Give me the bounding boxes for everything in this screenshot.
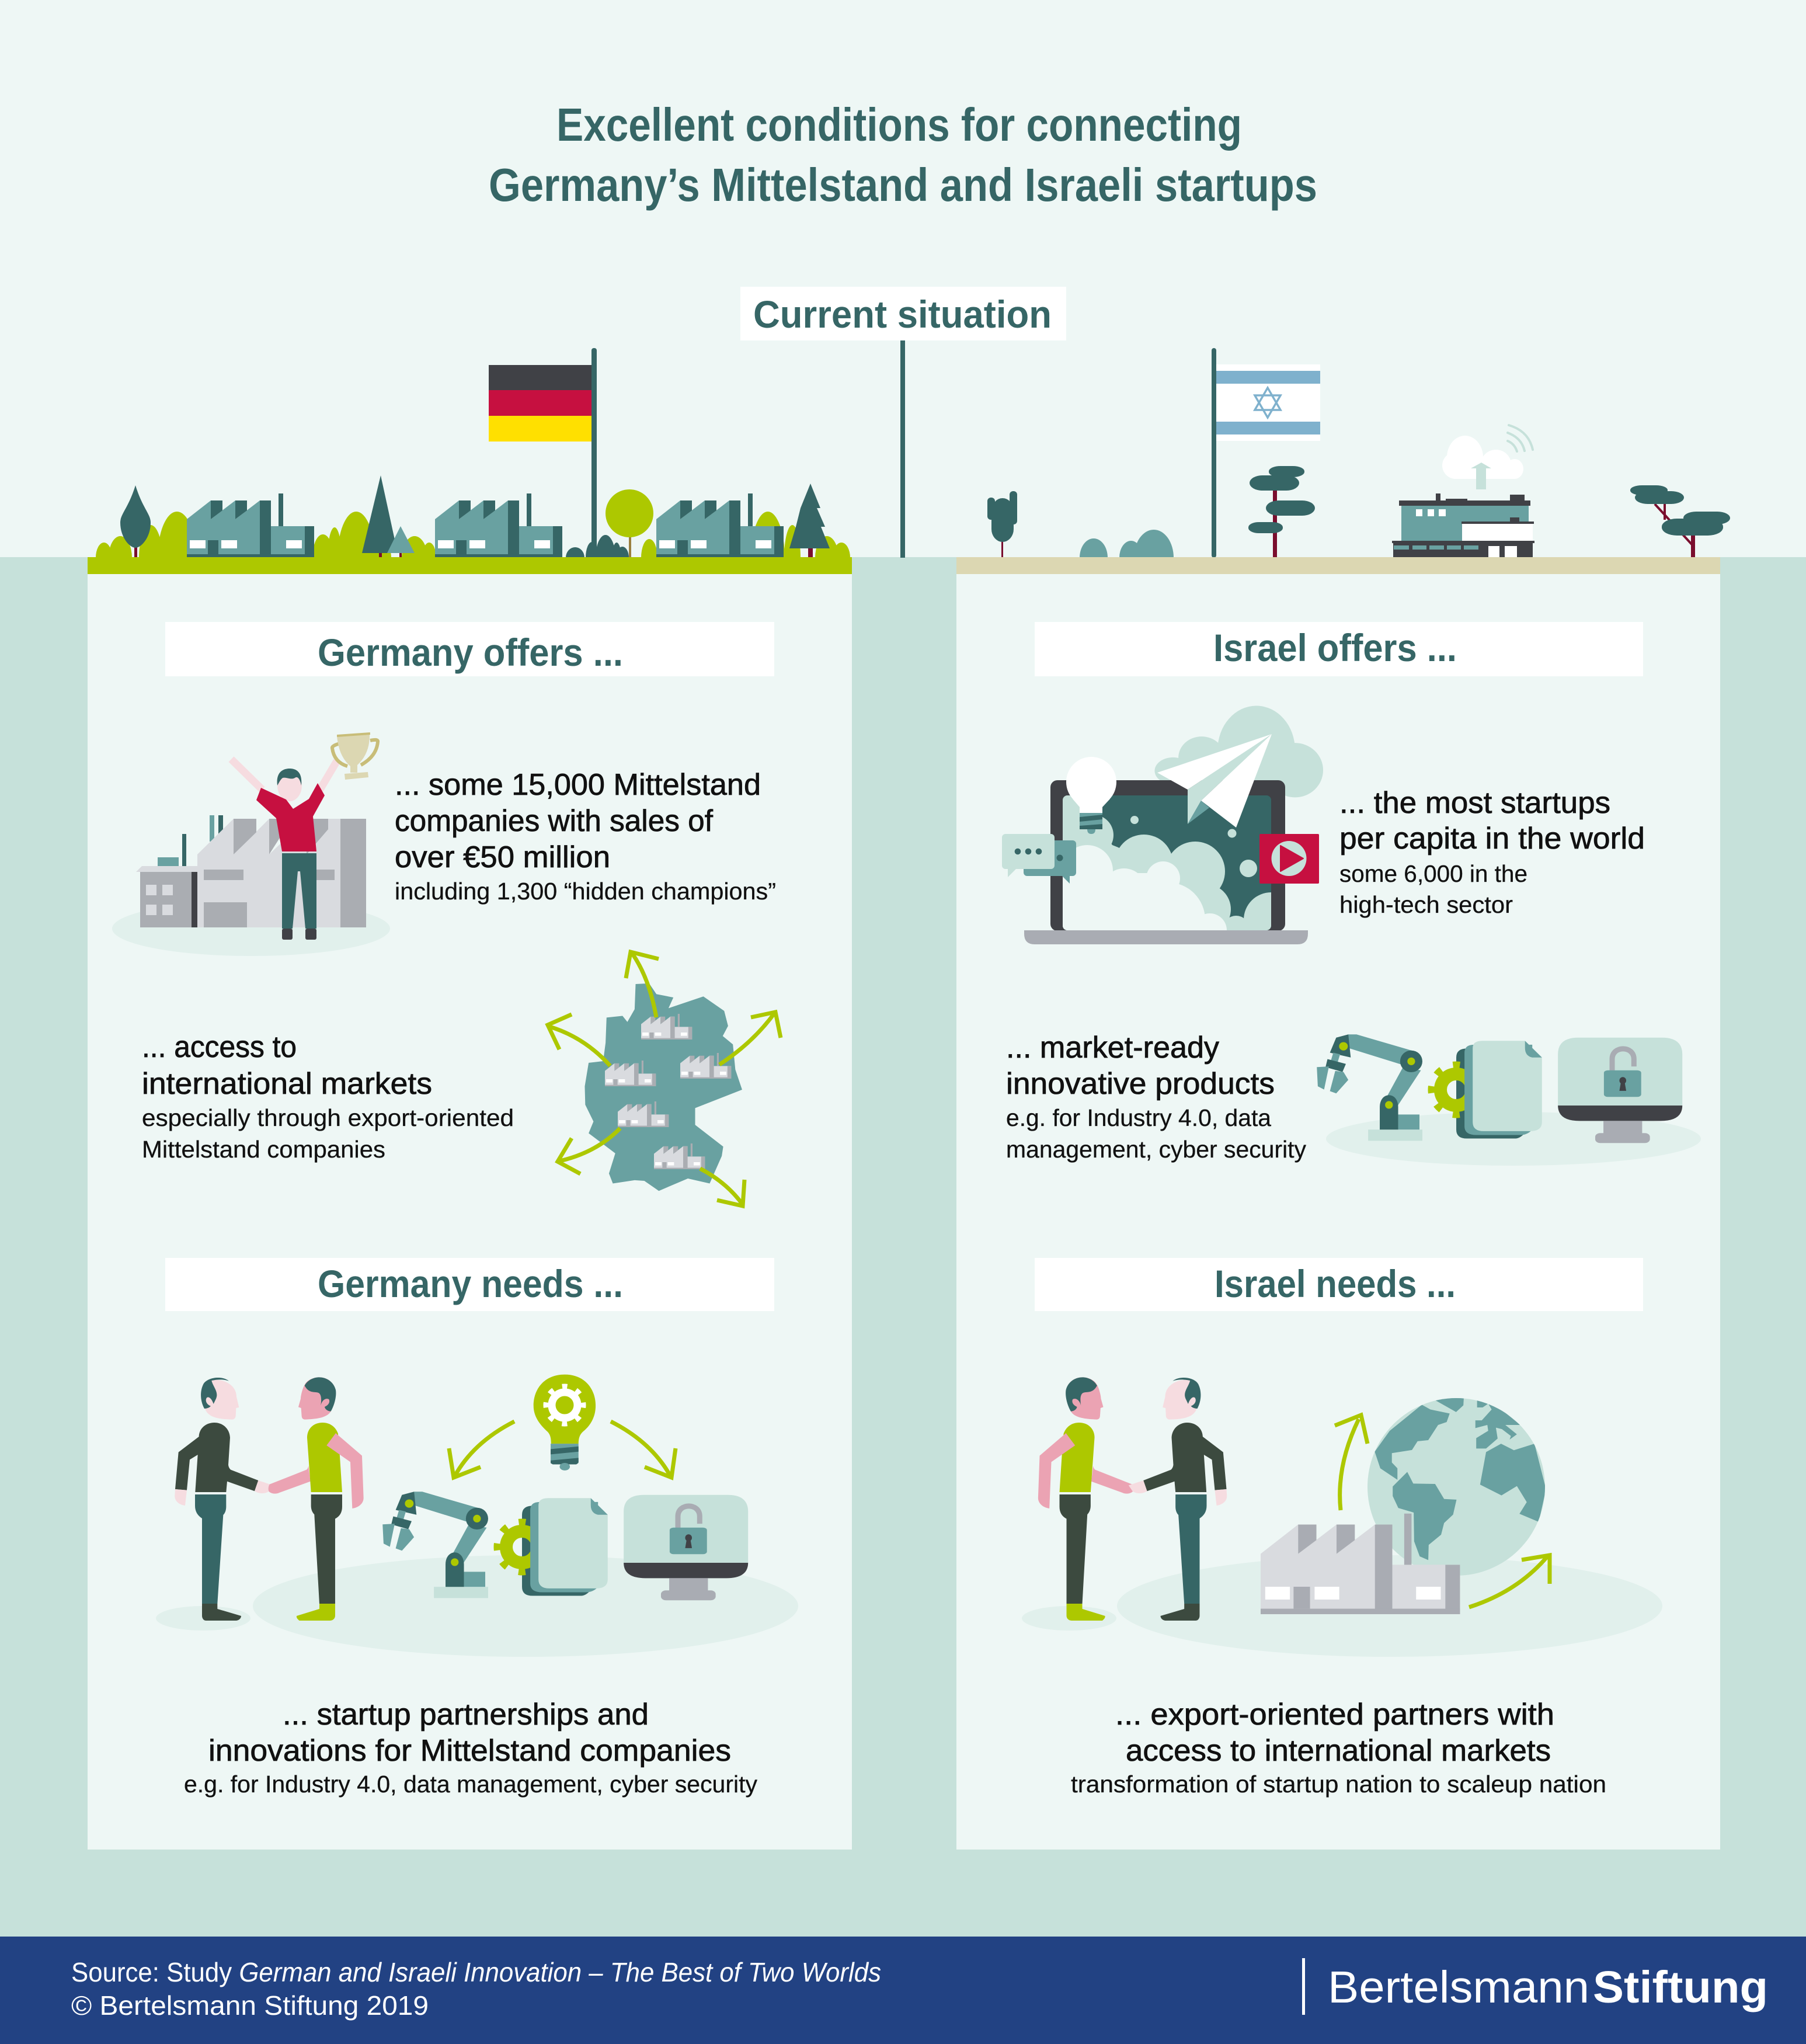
text: market-ready innovative products: ... market-ready xyxy=(1006,1031,1219,1065)
text: export-oriented partners xyxy=(1071,1698,1606,1798)
source text: Source: Study German and Israeli Innovation – The Best of Two Worlds xyxy=(71,1957,881,1987)
text: market-ready innovative products xyxy=(1006,1031,1306,1163)
heading: Israel offers: Israel offers ... xyxy=(1213,626,1457,669)
bushes xyxy=(96,512,850,557)
illustration: robot arm, documents and locked monitor xyxy=(382,1492,748,1600)
man xyxy=(231,759,337,940)
cloud with upload arrow and wifi xyxy=(1442,425,1533,489)
icon: speech bubbles xyxy=(1002,834,1076,884)
text: 15,000 Mittelstand companies: ... some 15,000 Mittelstand xyxy=(395,768,761,802)
text: export-oriented partners: transformation of startup nation to scaleup nation xyxy=(1071,1771,1606,1798)
landscape: Israel xyxy=(956,348,1730,586)
text: startup partnerships xyxy=(184,1698,757,1798)
arrow to robot xyxy=(449,1421,514,1478)
title: Excellent conditions for connecting xyxy=(556,99,1242,151)
landscape: Germany xyxy=(88,348,852,574)
person: pink man xyxy=(1038,1377,1133,1621)
panel: Israel xyxy=(956,557,1720,1850)
text: 15,000 Mittelstand companies: companies with sales of xyxy=(395,804,714,838)
text: export-oriented partners: ... export-oriented partners with xyxy=(1115,1698,1554,1732)
shadow under people left xyxy=(156,1606,250,1631)
tree xyxy=(987,491,1017,558)
text: most startups per capita: some 6,000 in the xyxy=(1339,860,1527,887)
illustration: map of Germany with factories and export arrows xyxy=(548,952,781,1206)
icon: globe xyxy=(1367,1397,1546,1576)
text: access to international markets: Mittelstand companies xyxy=(142,1136,385,1163)
arrow upper right xyxy=(719,1012,781,1065)
person: pink man xyxy=(269,1377,364,1621)
text: most startups per capita: ... the most startups xyxy=(1339,786,1610,820)
text: startup partnerships: innovations for Mittelstand companies xyxy=(208,1734,731,1768)
arrow right xyxy=(1469,1555,1550,1607)
source text: © Bertelsmann Stiftung 2019 xyxy=(71,1990,429,2021)
text: market-ready innovative products: innovative products xyxy=(1006,1067,1275,1101)
arrow to monitor xyxy=(611,1421,676,1478)
text: market-ready innovative products: e.g. for Industry 4.0, data xyxy=(1006,1104,1271,1131)
text: most startups per capita: high-tech sector xyxy=(1339,891,1513,918)
centre divider line xyxy=(900,340,905,558)
factory xyxy=(435,493,562,558)
factory xyxy=(187,493,314,558)
shadow under illustration right xyxy=(1117,1555,1662,1657)
illustration: shadow under robot, documents and monitor xyxy=(1326,1112,1701,1166)
arrow up xyxy=(1335,1415,1367,1510)
building xyxy=(1392,493,1534,557)
text: access to international markets: ... access to xyxy=(142,1030,297,1064)
title: Germany’s Mittelstand and Israeli startups xyxy=(489,159,1317,211)
icon: video tile xyxy=(1259,834,1319,884)
tree xyxy=(1248,466,1315,558)
footer xyxy=(0,1937,1806,2044)
heading: Germany needs xyxy=(165,1258,774,1311)
heading: current situation: Current situation xyxy=(753,293,1052,336)
text: access to international markets: international markets xyxy=(142,1067,432,1101)
icon: paper plane xyxy=(1157,734,1272,828)
logo: Bertelsmann Stiftung xyxy=(1302,1958,1768,2015)
illustration: factory and man with trophy xyxy=(112,732,390,956)
arrow lower right xyxy=(700,1169,744,1206)
text: 15,000 Mittelstand companies: including 1,300 “hidden champions” xyxy=(395,878,776,905)
trophy xyxy=(332,732,378,780)
text: export-oriented partners: access to international markets xyxy=(1126,1734,1551,1768)
text: most startups per capita xyxy=(1339,786,1645,918)
text: startup partnerships: ... startup partnerships and xyxy=(283,1698,649,1732)
factory xyxy=(656,493,784,558)
heading: Germany needs: Germany needs ... xyxy=(318,1262,623,1305)
illustration: robot arm, documents and locked monitor xyxy=(1317,1034,1682,1143)
heading: Germany offers xyxy=(165,622,774,676)
illustration: laptop with rocket cloud, paper plane, bulb, video tile, chat bubbles xyxy=(1002,706,1323,957)
heading: Israel needs xyxy=(1035,1258,1643,1311)
shadow under people right xyxy=(1022,1606,1116,1631)
logo: Bertelsmann Stiftung: Stiftung xyxy=(1593,1962,1768,2012)
arrow up xyxy=(626,952,659,1017)
ground: green xyxy=(88,557,852,574)
panel: Germany xyxy=(88,557,852,1850)
tree xyxy=(1630,485,1730,558)
shadow under illustration left xyxy=(253,1555,798,1657)
ground: sand xyxy=(956,557,1720,574)
text: startup partnerships: e.g. for Industry 4.0, data management, cyber security xyxy=(184,1771,757,1798)
heading: Germany offers: Germany offers ... xyxy=(318,631,623,674)
icon: idea bulb with gear xyxy=(534,1375,596,1471)
trees xyxy=(120,475,830,558)
person: pale man xyxy=(1129,1378,1227,1621)
text: access to international markets xyxy=(142,1030,514,1163)
bushes xyxy=(1080,530,1174,557)
flag: Israel xyxy=(1212,348,1320,558)
heading: Israel needs: Israel needs ... xyxy=(1215,1262,1456,1305)
title xyxy=(489,99,1317,211)
text: market-ready innovative products: management, cyber security xyxy=(1006,1136,1306,1163)
logo: Bertelsmann Stiftung: Bertelsmann xyxy=(1328,1962,1589,2012)
flag: Germany xyxy=(489,348,597,558)
person: pale man xyxy=(175,1378,273,1621)
dark shrubs xyxy=(566,535,629,557)
text: access to international markets: especially through export-oriented xyxy=(142,1104,514,1131)
source text xyxy=(71,1957,881,2021)
arrow upper left xyxy=(548,1014,610,1066)
arrow lower left xyxy=(557,1128,620,1174)
text: 15,000 Mittelstand companies xyxy=(395,768,776,905)
text: 15,000 Mittelstand companies: over €50 million xyxy=(395,840,610,874)
heading: Israel offers xyxy=(1035,622,1643,676)
icon: factory xyxy=(1261,1514,1460,1614)
icon: light bulb xyxy=(1066,757,1116,834)
text: most startups per capita: per capita in the world xyxy=(1339,822,1645,856)
